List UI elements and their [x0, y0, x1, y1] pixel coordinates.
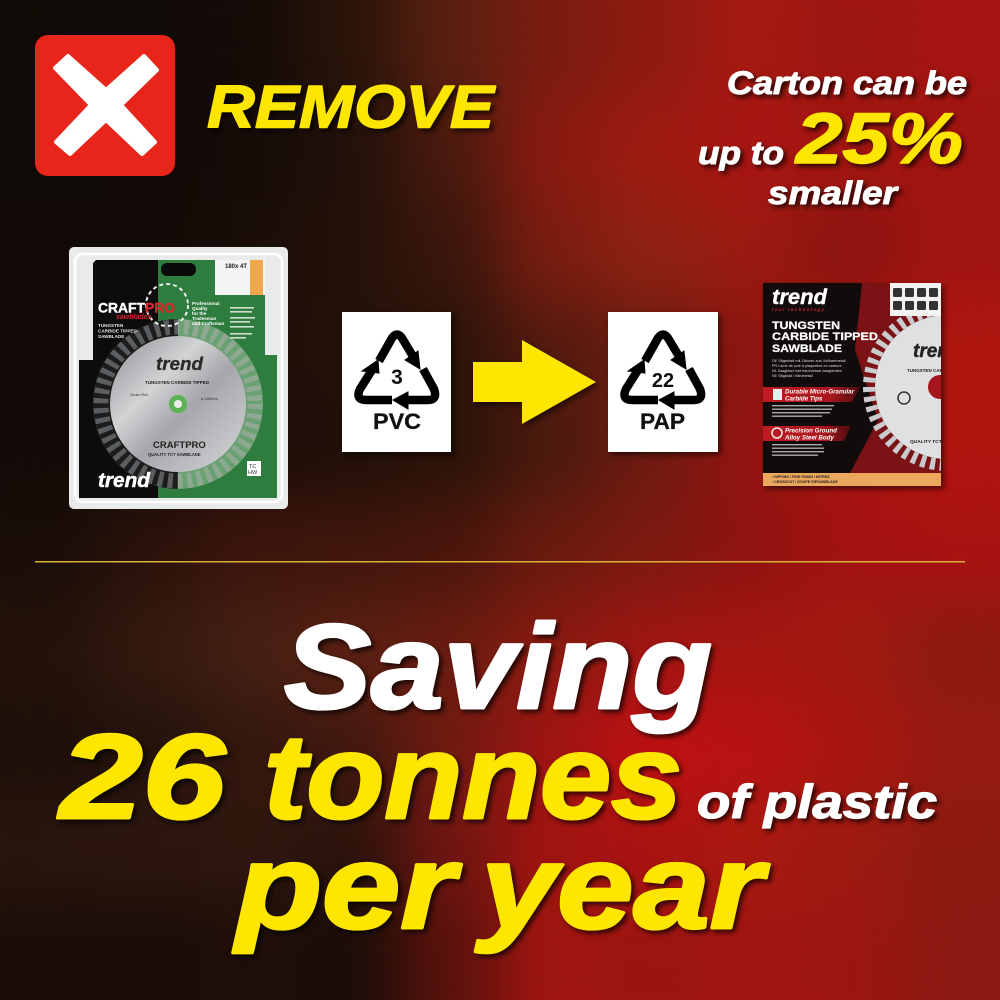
callout: carton up to 25% smaller: smaller — [768, 175, 899, 211]
craftpro logo — [98, 284, 188, 326]
craftpro logo: CRAFT — [98, 300, 145, 316]
feature text lines — [772, 444, 824, 456]
panel: PAP recycling code: PAP — [640, 409, 685, 434]
card text green: Professional — [192, 301, 220, 306]
callout: carton up to 25% smaller: 25% — [794, 100, 963, 179]
product: old plastic clamshell pack: 180x 4T — [225, 264, 247, 270]
card text green: for the — [192, 311, 207, 316]
card text left: SAWBLADE — [98, 334, 124, 339]
headline: per year: year — [475, 820, 770, 954]
product: new cardboard carton: tool technology — [772, 307, 824, 312]
language lines: FR Lame de scie à plaquettes en carbure — [772, 364, 842, 368]
callout: carton up to 25% smaller: Carton can be — [727, 65, 967, 101]
card text left: CARBIDE TIPPED — [98, 328, 137, 334]
feature band: carbide tips: Durable Micro-Granular — [785, 388, 855, 396]
product title: TUNGSTEN — [772, 320, 840, 332]
label box — [215, 260, 265, 295]
feature band: steel body: Precision Ground — [785, 428, 837, 434]
feature band: steel body: Alloy Steel Body — [784, 434, 834, 442]
language lines: NL Zaagblad met hardmetaal zaagtanden — [772, 369, 842, 373]
callout: carton up to 25% smaller: up to — [698, 135, 784, 171]
TC HW badge: HW — [248, 470, 258, 476]
icon: recycling triangle — [358, 334, 435, 400]
saw blade: ⌀ 180mm — [201, 396, 219, 401]
product: new cardboard carton: • RIPPING / FINE FINISH / MITRES — [772, 475, 830, 479]
panel: PAP recycling code: 22 — [652, 370, 674, 392]
feature text lines — [772, 405, 834, 417]
arrow — [473, 340, 596, 424]
feature band: carbide tips — [763, 387, 860, 402]
card bullets — [230, 307, 255, 339]
language lines: DE Sägeblatt mit Zähnen aus Vollhartmetall — [772, 359, 846, 363]
craftpro logo: sawblades — [116, 314, 152, 321]
headline: per year — [232, 820, 770, 954]
headline: 26 tonnes of plastic: of plastic — [697, 775, 937, 828]
saw blade: QUALITY TCT — [910, 439, 942, 445]
product: new cardboard carton — [762, 282, 948, 493]
feature band: steel body — [763, 426, 851, 442]
headline: 26 tonnes of plastic — [58, 710, 937, 844]
divider — [35, 561, 965, 562]
green card — [158, 260, 277, 498]
saw blade — [863, 316, 941, 471]
card text left: TUNGSTEN — [98, 323, 124, 328]
orange strip — [763, 473, 941, 486]
headline: 26 tonnes of plastic: tonnes — [264, 710, 682, 844]
language lines: SE Sågblad i hårdmetall — [772, 374, 813, 378]
black card — [79, 260, 158, 498]
saw blade: Order Ref. — [130, 392, 149, 397]
panel: PVC recycling code: 3 — [391, 366, 403, 389]
heading: remove: REMOVE — [207, 74, 496, 140]
feature band: carbide tips: Carbide Tips — [785, 396, 823, 402]
callout: carton up to 25% smaller — [698, 65, 967, 211]
card text green: Tradesman — [192, 316, 216, 321]
craftpro logo: PRO — [145, 300, 175, 316]
product: new cardboard carton: • CROSSCUT / DOUPE RIPSAWBLADE — [772, 480, 838, 484]
saw blade: trend — [156, 354, 204, 374]
saw blade — [93, 319, 263, 489]
saw blade: QUALITY TCT SAWBLADE — [148, 452, 201, 457]
product title: CARBIDE TIPPED — [772, 331, 878, 343]
saw blade: CRAFTPRO — [153, 440, 206, 451]
card text green: and Craftsman — [192, 321, 224, 326]
saw blade: TUNGSTEN CARBIDE — [907, 368, 954, 373]
icon box — [890, 283, 941, 316]
panel: PAP recycling code — [608, 312, 718, 452]
trend logo: trend — [98, 470, 151, 492]
TC HW badge — [247, 461, 261, 476]
clamshell — [69, 247, 288, 509]
TC HW badge: TC — [249, 464, 256, 470]
saw blade: trend — [913, 341, 961, 362]
icon: recycling triangle — [624, 334, 701, 400]
product title: SAWBLADE — [772, 343, 842, 355]
icon: remove cross — [35, 35, 175, 176]
headline: 26 tonnes of plastic: 26 — [58, 710, 227, 844]
product title — [772, 320, 878, 355]
panel: PVC recycling code — [342, 312, 451, 452]
trend logo: trend — [772, 286, 828, 309]
hang hole — [161, 263, 196, 276]
headline: saving: Saving — [284, 600, 712, 734]
red flame artwork — [850, 283, 941, 473]
saw blade: TUNGSTEN CARBIDE TIPPED — [145, 380, 210, 385]
product: old plastic clamshell pack — [69, 247, 288, 509]
card text green: Quality — [192, 306, 208, 311]
panel: PVC recycling code: PVC — [373, 409, 421, 434]
headline: per year: per — [232, 820, 462, 954]
